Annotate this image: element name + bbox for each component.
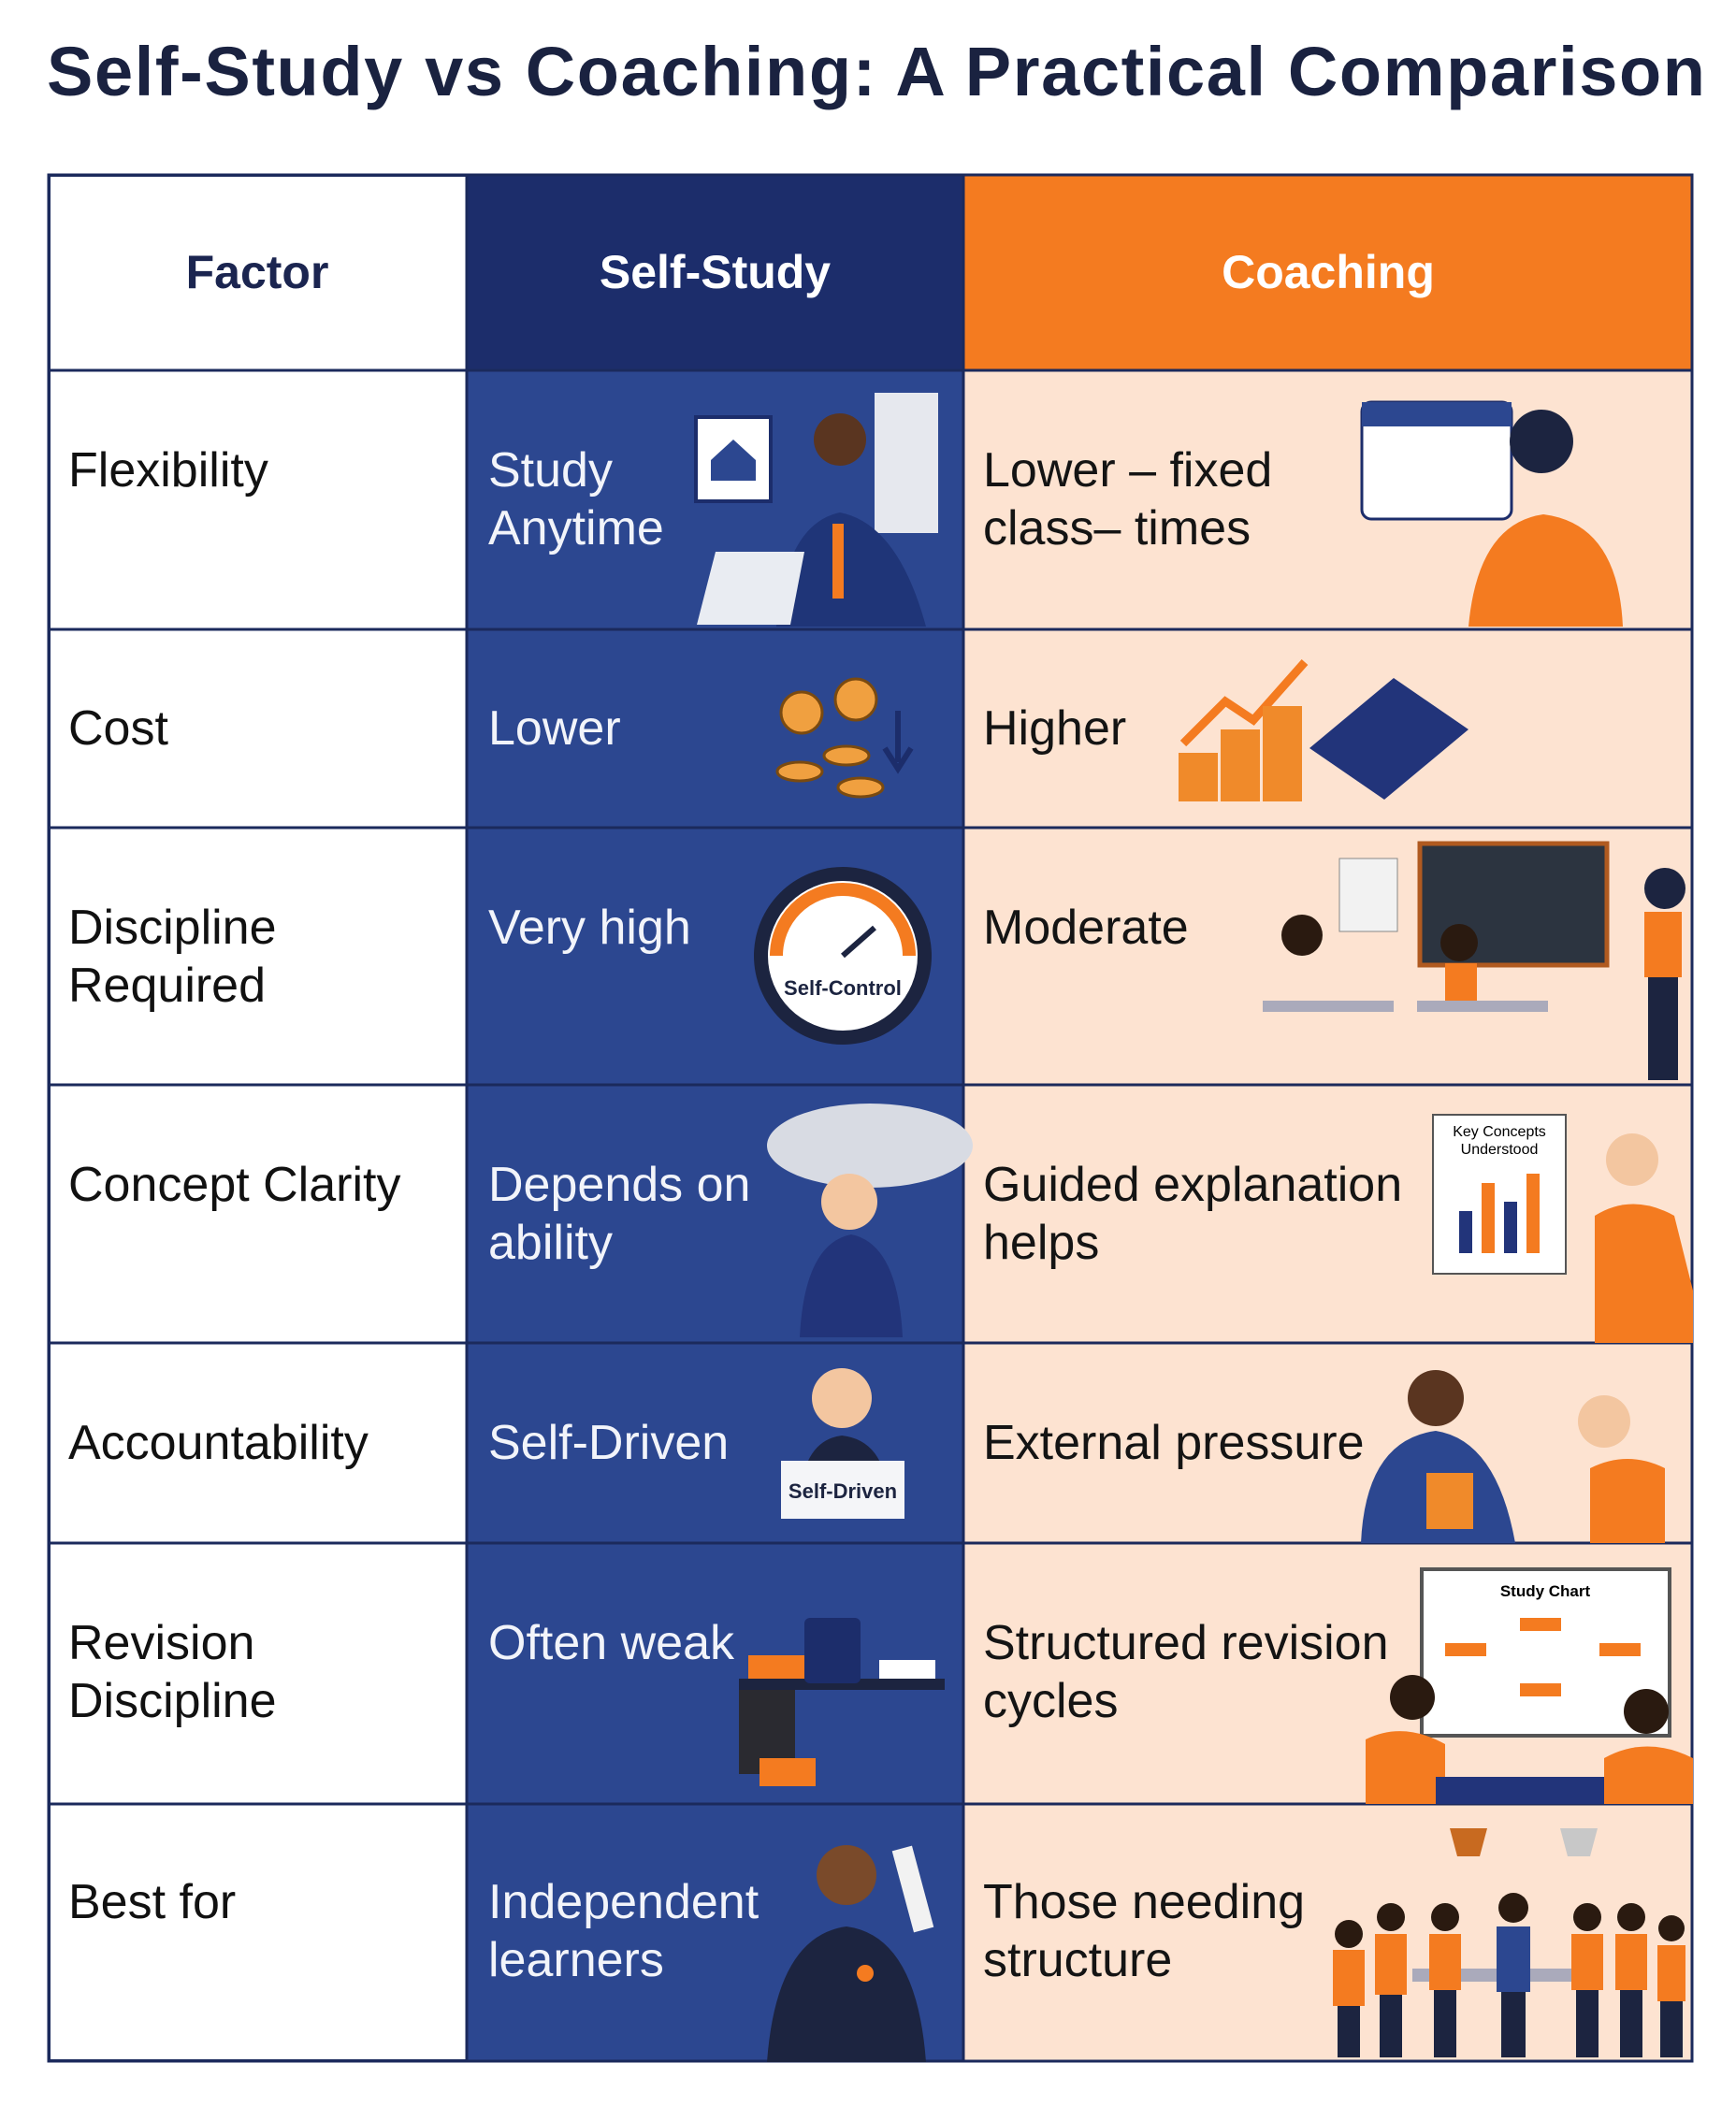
text: Those needing bbox=[983, 1875, 1305, 1929]
coaching values: class– times bbox=[983, 501, 1251, 556]
text: structure bbox=[983, 1933, 1172, 1987]
text: Discipline bbox=[68, 901, 277, 955]
text: Cost bbox=[68, 701, 168, 756]
icon: coins falling bbox=[777, 679, 883, 797]
icon: calendar and thinking person bbox=[1362, 402, 1623, 627]
icon: self-driven sign: Self-Driven bbox=[788, 1479, 897, 1503]
icon: house and man at laptop bbox=[696, 393, 938, 627]
header: coaching: Coaching bbox=[1222, 246, 1435, 298]
text: Structured revision bbox=[983, 1616, 1389, 1670]
text: Independent bbox=[488, 1875, 759, 1929]
text: Moderate bbox=[983, 901, 1189, 955]
icon: study chart and students bbox=[1366, 1569, 1693, 1804]
text: helps bbox=[983, 1216, 1099, 1270]
icon: coin stacks and money bbox=[1179, 662, 1468, 801]
icon: group of students with trophies bbox=[1333, 1828, 1685, 2057]
factor labels: Flexibility bbox=[68, 443, 268, 498]
icon: chart and teacher: Key Concepts bbox=[1453, 1124, 1546, 1140]
column: self-study background bbox=[467, 370, 963, 2062]
text: Best for bbox=[68, 1875, 236, 1929]
text: learners bbox=[488, 1933, 664, 1987]
icon: study chart and students: Study Chart bbox=[1500, 1582, 1591, 1600]
text: Required bbox=[68, 959, 266, 1013]
text: Concept Clarity bbox=[68, 1158, 400, 1212]
icon: graduate bbox=[767, 1845, 933, 2062]
text: Depends on bbox=[488, 1158, 750, 1212]
text: Very high bbox=[488, 901, 691, 955]
text: Revision bbox=[68, 1616, 254, 1670]
text: Self-Driven bbox=[488, 1416, 729, 1470]
text: Accountability bbox=[68, 1416, 369, 1470]
text: Often weak bbox=[488, 1616, 734, 1670]
icon: teacher pressure bbox=[1361, 1370, 1665, 1543]
header: self-study bbox=[467, 174, 963, 370]
icon: messy desk bbox=[739, 1618, 945, 1786]
text: ability bbox=[488, 1216, 613, 1270]
text: cycles bbox=[983, 1674, 1118, 1728]
text: Discipline bbox=[68, 1674, 277, 1728]
column: coaching background bbox=[963, 370, 1693, 2062]
header: coaching bbox=[963, 174, 1693, 370]
icon: chart and teacher bbox=[1433, 1115, 1693, 1343]
self-study values: Anytime bbox=[488, 501, 664, 556]
coaching values bbox=[983, 443, 1272, 556]
header: factor: Factor bbox=[186, 246, 328, 298]
icon: chart and teacher: Understood bbox=[1461, 1142, 1538, 1158]
icon: thinking cloud person bbox=[767, 1104, 973, 1337]
text: External pressure bbox=[983, 1416, 1365, 1470]
coaching values: Lower – fixed bbox=[983, 443, 1272, 498]
self-study values bbox=[488, 443, 664, 556]
title: Self-Study vs Coaching: A Practical Comparison bbox=[47, 33, 1707, 110]
icon: gauge self-control: Self-Control bbox=[784, 976, 902, 1000]
text: Guided explanation bbox=[983, 1158, 1402, 1212]
icon: gauge self-control bbox=[754, 867, 932, 1045]
icon: self-driven sign bbox=[781, 1368, 904, 1519]
icon: classroom bbox=[1263, 844, 1685, 1080]
text: Lower bbox=[488, 701, 621, 756]
text: Higher bbox=[983, 701, 1126, 756]
header: self-study: Self-Study bbox=[600, 246, 831, 298]
self-study values: Study bbox=[488, 443, 613, 498]
